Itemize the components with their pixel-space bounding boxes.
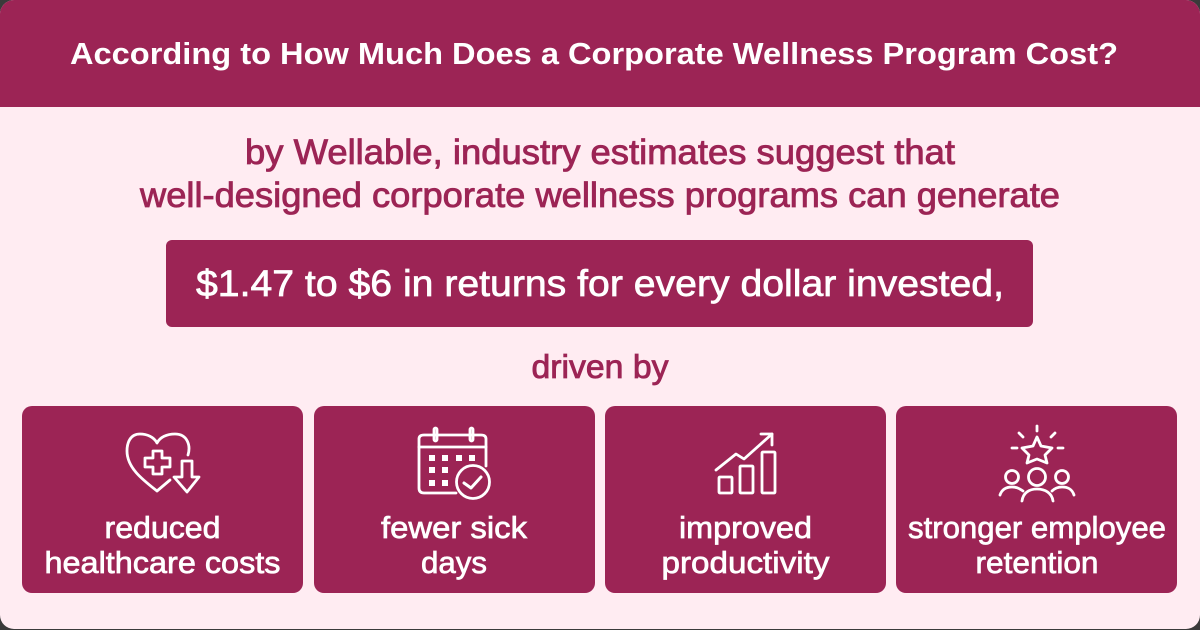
label: reduced (104, 510, 220, 545)
title: According to How Much Does a Corporate Wellness Program Cost? (70, 36, 1118, 71)
intro text: by Wellable, industry estimates suggest that (245, 133, 955, 172)
label: healthcare costs (44, 545, 280, 580)
label: days (421, 545, 487, 580)
label: retention (976, 545, 1098, 580)
label (44, 510, 280, 580)
icon: calendar with check (419, 428, 490, 498)
label: fewer sick (381, 510, 528, 545)
header banner (0, 0, 1200, 107)
label (908, 510, 1166, 580)
icon: rising bar chart (716, 434, 775, 493)
label (381, 510, 528, 580)
intro text: well-designed corporate wellness programs can generate (139, 176, 1060, 215)
panel: reduced healthcare costs (22, 406, 303, 593)
callout: returns range: $1.47 to $6 in returns for every dollar invested, (196, 263, 1004, 304)
panel: stronger employee retention (896, 406, 1177, 593)
intro text (139, 133, 1060, 215)
label: stronger employee (908, 510, 1166, 545)
label: improved (679, 510, 812, 545)
icon: heart with cross and down arrow (127, 434, 199, 492)
panel: improved productivity (605, 406, 886, 593)
label: productivity (662, 545, 830, 580)
panel: fewer sick days (314, 406, 595, 593)
icon: people under a star (1000, 426, 1074, 501)
label (662, 510, 830, 580)
callout: returns range (166, 240, 1033, 327)
driven by label: driven by (532, 348, 669, 385)
